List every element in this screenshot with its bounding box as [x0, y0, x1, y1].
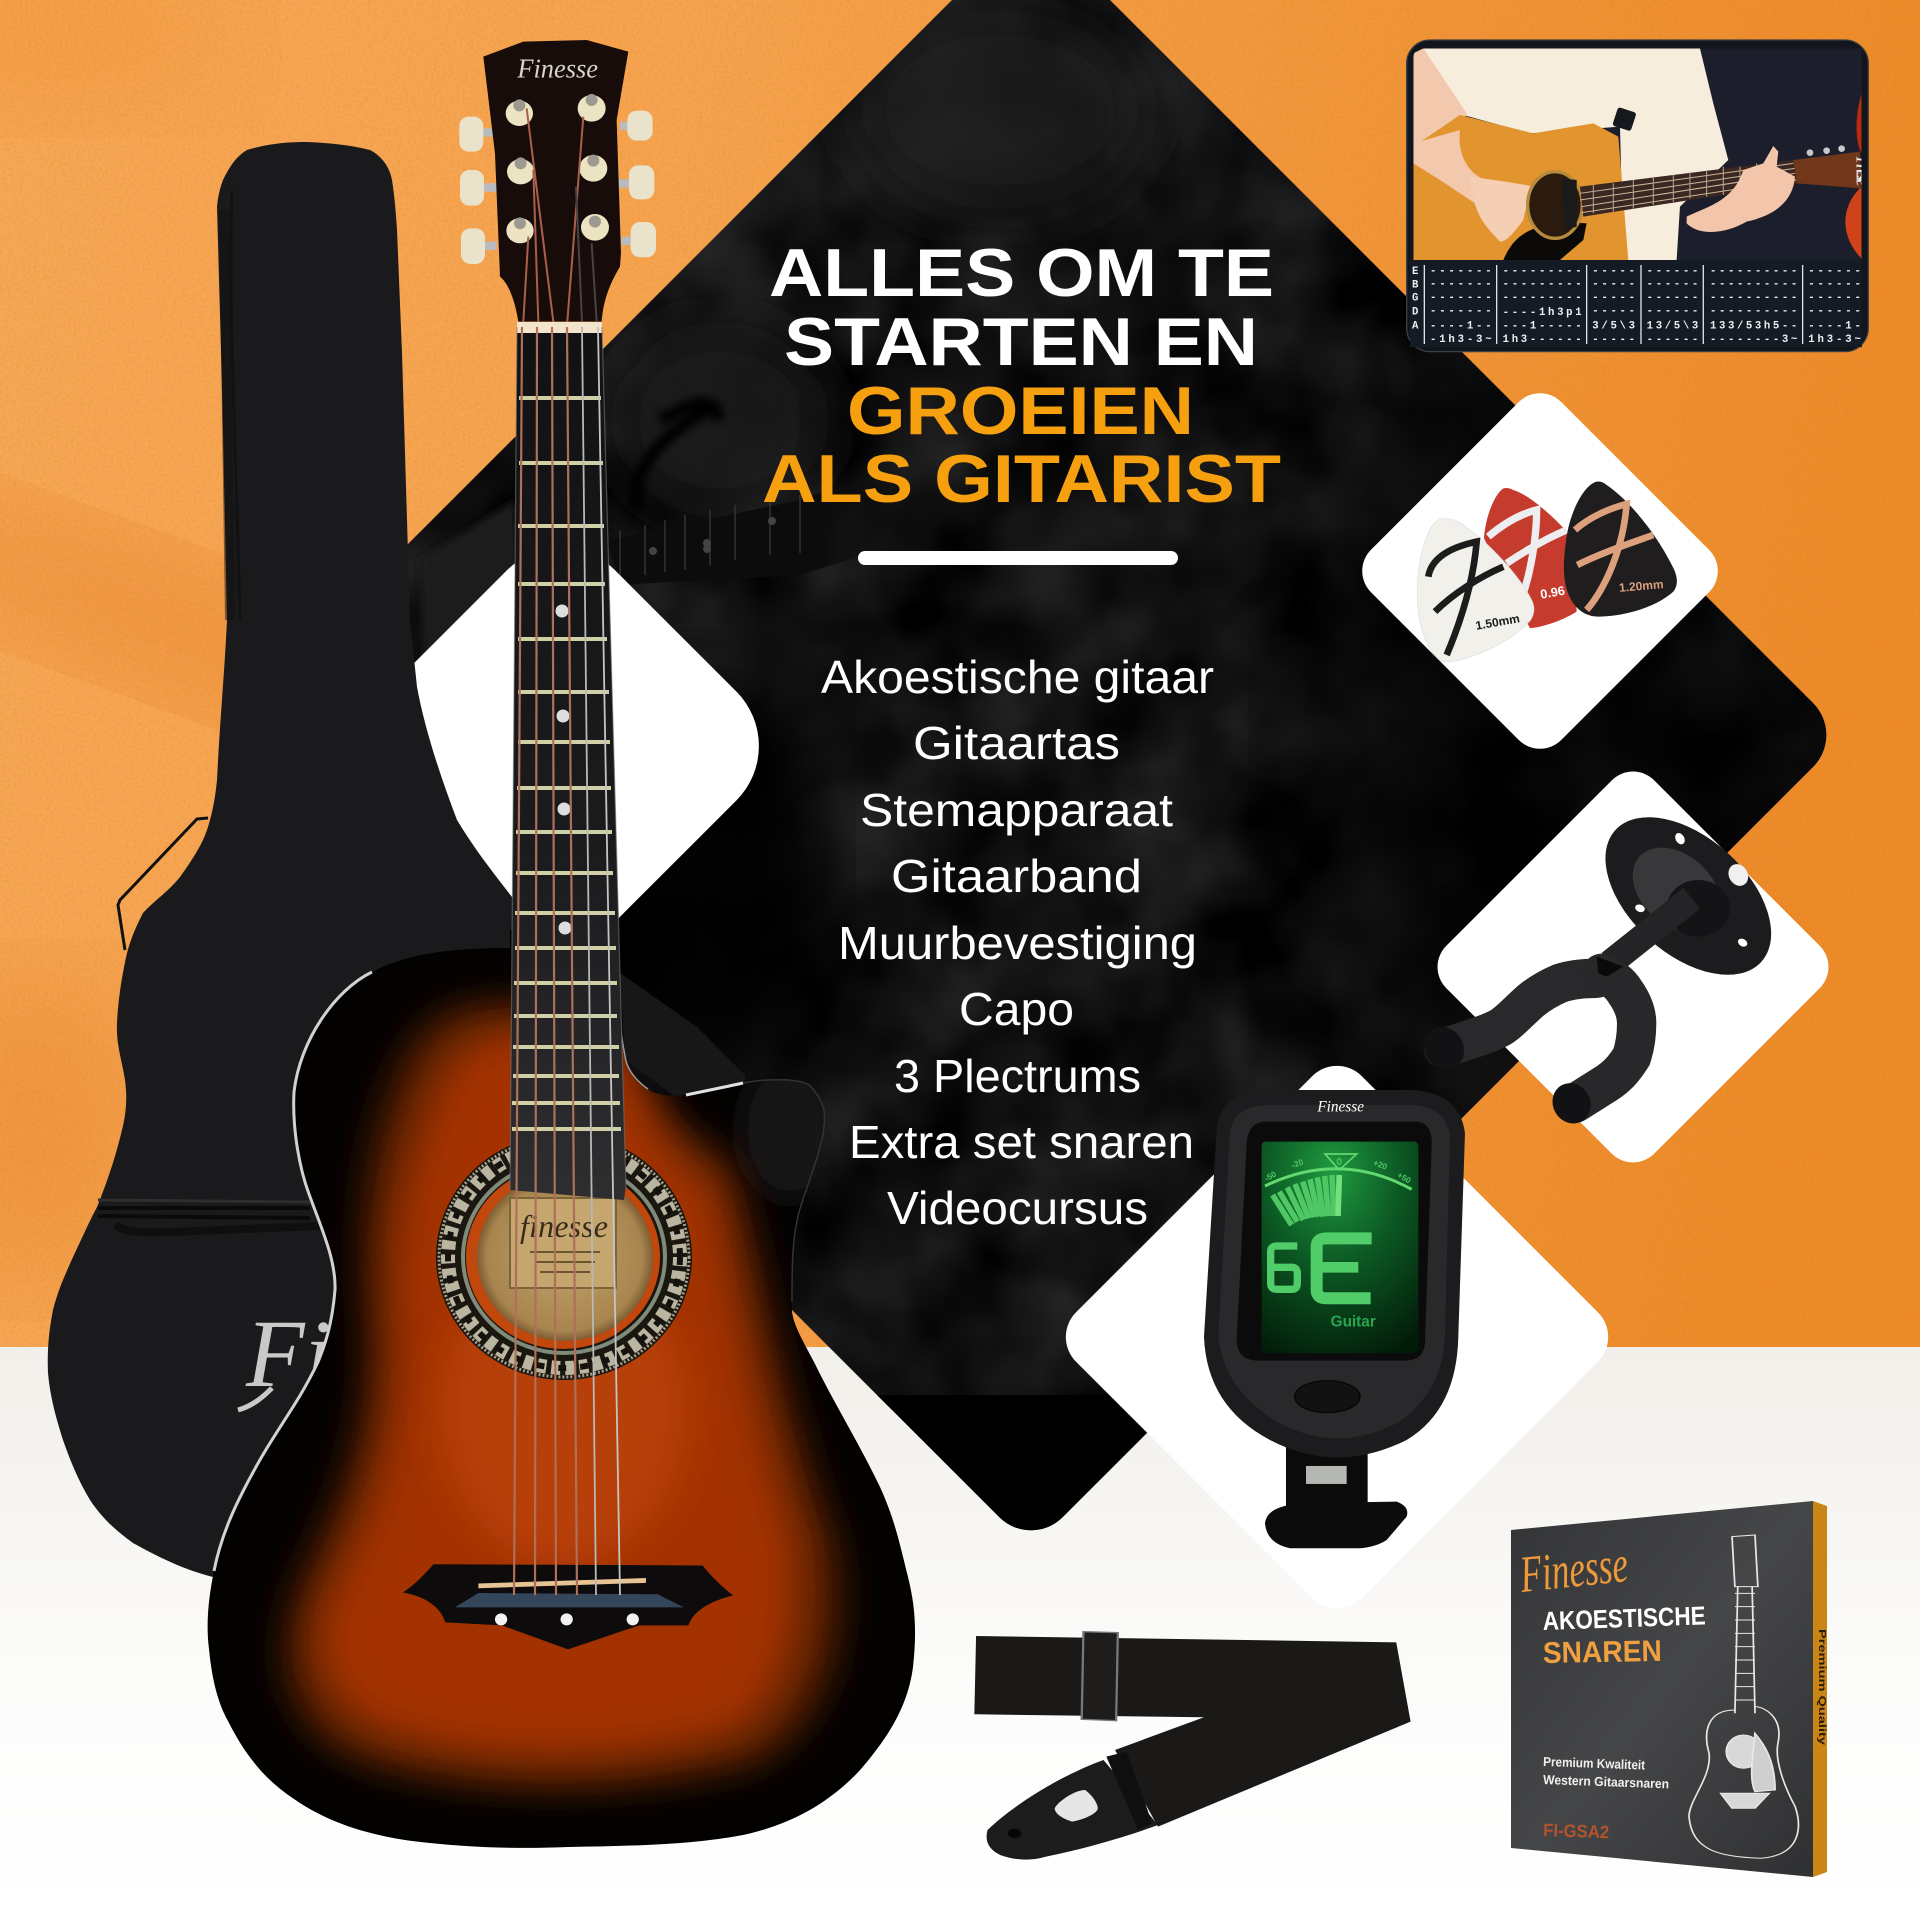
black diamond panel with faded guitarist photo — [408, 0, 1826, 1530]
guitar tab strip: ------ — [1808, 292, 1861, 304]
guitar tab strip: ----- — [1592, 265, 1635, 277]
LCD screen — [1262, 1142, 1418, 1353]
box of acoustic strings — [1511, 1501, 1827, 1877]
guitar tab strip: ---------- — [1710, 279, 1797, 291]
guitar tab strip: ------ — [1647, 334, 1698, 346]
list of included items: 3 Plectrums — [894, 1050, 1141, 1102]
guitar tab strip: ------ — [1808, 305, 1861, 317]
list of included items — [821, 651, 1214, 1234]
video still: guitarist: Finesse — [1852, 156, 1873, 187]
LCD screen: -50 — [1263, 1169, 1278, 1183]
right foam arm — [1575, 973, 1637, 1103]
white diamond: picks — [1350, 381, 1730, 761]
box of acoustic strings: Premium Kwaliteit — [1543, 1754, 1646, 1773]
background: orange wall — [0, 0, 1920, 1348]
LCD screen: -20 — [1290, 1157, 1305, 1170]
guitar tab strip: 133/53h5-- — [1710, 320, 1797, 332]
box of acoustic strings: Finesse — [1517, 1536, 1631, 1604]
title — [762, 235, 1281, 517]
list of included items: Akoestische gitaar — [821, 651, 1214, 703]
title: ALS GITARIST — [762, 441, 1281, 517]
black pick — [1564, 481, 1677, 617]
list of included items: Gitaartas — [913, 717, 1120, 769]
LCD screen: 0 — [1336, 1157, 1342, 1168]
box of acoustic strings: Western Gitaarsnaren — [1543, 1772, 1669, 1791]
label inside the sound hole: finesse — [520, 1208, 608, 1244]
guitar tab strip: ----- — [1592, 292, 1635, 304]
frets — [512, 398, 621, 1129]
bridge — [403, 1564, 733, 1649]
guitar tab strip: ------ — [1808, 265, 1861, 277]
faded guitar neck in photo — [612, 492, 848, 584]
guitar tab strip: --------3~ — [1710, 334, 1797, 346]
guitar tab strip: D — [1412, 307, 1418, 319]
guitar tab strip: ------ — [1647, 305, 1698, 317]
three guitar picks — [1417, 481, 1677, 662]
guitar tab strip: 13/5\3 — [1647, 320, 1698, 332]
list of included items: Videocursus — [887, 1182, 1148, 1234]
rosette — [436, 1134, 692, 1380]
guitar strap — [974, 1632, 1411, 1860]
guitar tab strip: ------ — [1647, 265, 1698, 277]
LCD screen: +50 — [1396, 1170, 1413, 1186]
acoustic guitar — [190, 40, 940, 1870]
white diamond behind guitar neck — [331, 516, 791, 976]
title: STARTEN EN — [784, 304, 1258, 380]
guitar tab strip: B — [1412, 279, 1419, 291]
list of included items: Stemapparaat — [860, 784, 1173, 836]
tuner logo: Finesse — [1316, 1099, 1364, 1116]
guitar tab strip: ----1-- — [1430, 320, 1492, 332]
guitar tab strip: ------- — [1430, 279, 1492, 291]
strap logo — [1055, 1790, 1098, 1822]
box front — [1511, 1501, 1813, 1877]
video course tablet — [1407, 40, 1873, 352]
white diamond: wall hanger — [1425, 759, 1841, 1175]
headstock logo: Finesse — [516, 53, 598, 83]
guitar tab strip: ----1h3p1 — [1503, 307, 1582, 319]
string number and note — [1271, 1238, 1372, 1298]
title: GROEIEN — [847, 373, 1194, 449]
label inside the sound hole — [510, 1198, 616, 1288]
guitar tab strip: ----- — [1592, 305, 1635, 317]
gig bag — [48, 142, 560, 1577]
white pick — [1417, 519, 1534, 662]
guitar tab strip: ------- — [1430, 265, 1492, 277]
guitar tab strip: ------- — [1430, 292, 1492, 304]
clip-on tuner — [1204, 1090, 1465, 1548]
headstock — [459, 40, 656, 322]
white diamond: tuner — [1051, 1051, 1623, 1623]
strap slider — [1082, 1632, 1118, 1721]
left foam arm — [1443, 978, 1597, 1048]
guitar tab strip: ------- — [1430, 305, 1492, 317]
guitar tab strip: -1h3-3~ — [1430, 334, 1492, 346]
tuner clip and base — [1265, 1447, 1407, 1548]
guitar body — [190, 920, 940, 1870]
guitar line drawing on box — [1689, 1535, 1798, 1858]
red pick — [1484, 488, 1577, 628]
guitar tab strip: ---------- — [1710, 305, 1797, 317]
LCD screen: +20 — [1372, 1157, 1389, 1172]
guitar tab strip: ------ — [1647, 292, 1698, 304]
fretboard — [510, 322, 626, 1200]
guitar tab strip: E — [1412, 266, 1418, 278]
list of included items: Muurbevestiging — [838, 917, 1197, 969]
guitar tab strip: G — [1412, 293, 1418, 305]
sound hole — [466, 1165, 660, 1349]
strings — [514, 327, 620, 1595]
white pick: 1.50mm — [1474, 611, 1521, 633]
guitar tab strip: A — [1412, 320, 1419, 332]
list of included items: Capo — [959, 983, 1074, 1035]
handle loop — [118, 818, 208, 950]
guitar tab strip: ------ — [1808, 279, 1861, 291]
guitar tab strip: ----- — [1592, 279, 1635, 291]
list of included items: Extra set snaren — [849, 1116, 1194, 1168]
power button — [1295, 1381, 1360, 1413]
wall plate — [1576, 787, 1800, 1005]
background: white floor — [0, 1347, 1920, 1920]
title: ALLES OM TE — [769, 235, 1274, 311]
title divider — [858, 551, 1178, 565]
guitar tab strip: ------ — [1647, 279, 1698, 291]
box spine — [1813, 1501, 1827, 1877]
box of acoustic strings: FI-GSA2 — [1543, 1820, 1610, 1842]
guitar tab strip: 1h3-3~ — [1808, 334, 1861, 346]
black pick: 1.20mm — [1618, 577, 1664, 595]
guitar tab strip: ---1----- — [1503, 320, 1582, 332]
rod — [1610, 898, 1692, 963]
bag logo: Fi — [245, 1300, 331, 1407]
guitar tab strip: ---------- — [1710, 292, 1797, 304]
guitar tab strip: --------- — [1503, 265, 1582, 277]
body edge highlight — [214, 972, 372, 1571]
guitar tab strip: ----- — [1592, 334, 1635, 346]
leather end — [987, 1760, 1158, 1860]
guitar tab strip: 1h3------ — [1503, 334, 1582, 346]
guitar tab strip: --------- — [1503, 279, 1582, 291]
guitar tab strip — [1410, 260, 1862, 347]
guitar tab strip: ----1- — [1808, 320, 1861, 332]
box of acoustic strings: SNAREN — [1543, 1635, 1662, 1670]
fret markers — [556, 604, 572, 934]
LCD screen: Guitar — [1331, 1314, 1376, 1331]
red pick: 0.96 — [1539, 584, 1566, 602]
wall hanger — [1416, 787, 1800, 1131]
video still: guitarist — [1413, 48, 1873, 260]
guitar tab strip: ---------- — [1710, 265, 1797, 277]
guitar tab strip: 3/5\3 — [1592, 320, 1635, 332]
guitar tab strip: --------- — [1503, 292, 1582, 304]
box of acoustic strings: AKOESTISCHE — [1542, 1600, 1706, 1636]
box of acoustic strings: Premium Quality — [1816, 1629, 1827, 1746]
list of included items: Gitaarband — [891, 850, 1142, 902]
